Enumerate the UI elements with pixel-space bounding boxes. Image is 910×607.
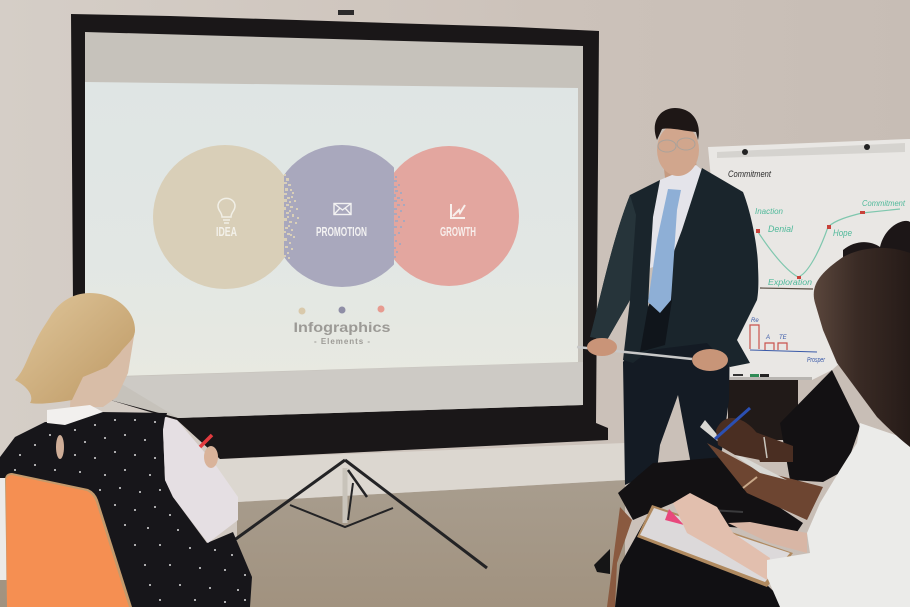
white sleeve bbox=[163, 417, 238, 543]
whiteboard notes: Inaction bbox=[755, 207, 784, 216]
dark trousers bbox=[615, 520, 790, 607]
icon: envelope bbox=[334, 204, 351, 214]
seated woman in black bbox=[607, 370, 860, 607]
slide subtitle: - Elements - bbox=[314, 337, 370, 346]
icon: growth chart bbox=[451, 204, 465, 218]
forearm bbox=[707, 443, 823, 520]
second hand bbox=[728, 522, 807, 553]
left sleeve highlight bbox=[590, 195, 636, 340]
pointer stick bbox=[577, 347, 692, 359]
clipboard paper bbox=[640, 508, 790, 582]
whiteboard notes: A bbox=[765, 335, 770, 341]
blue pen bbox=[715, 408, 750, 439]
clipboard bbox=[637, 505, 793, 587]
blonde hair bbox=[15, 293, 135, 404]
marker rail bbox=[717, 143, 905, 158]
silver bracelets bbox=[764, 437, 767, 458]
keyhole opening bbox=[56, 435, 64, 459]
hand with red pen bbox=[200, 435, 218, 468]
right hand bbox=[692, 349, 728, 371]
glasses bbox=[658, 138, 695, 152]
projected slide bbox=[85, 82, 578, 377]
lower screen band bbox=[110, 362, 583, 418]
screen surface bbox=[85, 32, 583, 418]
white dress dots bbox=[14, 419, 246, 603]
icon: light bulb bbox=[218, 198, 235, 223]
white collar bbox=[47, 405, 103, 425]
neck and face bbox=[70, 330, 135, 407]
black skirt bbox=[618, 457, 803, 532]
whiteboard notes: Re bbox=[751, 318, 759, 324]
hair bbox=[655, 108, 699, 140]
long dark hair bbox=[814, 248, 910, 447]
whiteboard notes: Prosper bbox=[807, 357, 825, 364]
whiteboard notes: Exploration bbox=[768, 278, 813, 287]
projector tripod bbox=[233, 460, 487, 568]
whiteboard notes: TE bbox=[779, 335, 788, 341]
shoe bbox=[594, 549, 610, 574]
label: growth: GROWTH bbox=[440, 224, 476, 239]
whiteboard notes: Hope bbox=[833, 228, 852, 238]
legend dots bbox=[298, 306, 384, 314]
black top bbox=[780, 370, 860, 482]
woman in white foreground bbox=[615, 248, 910, 607]
jacket bbox=[590, 168, 758, 367]
orange chair bbox=[5, 473, 132, 607]
bare leg bbox=[607, 507, 632, 607]
back audience hair bbox=[843, 221, 910, 280]
label: idea: IDEA bbox=[216, 224, 237, 239]
head bbox=[657, 124, 699, 176]
shirt bbox=[650, 165, 702, 268]
waistcoat opening bbox=[640, 262, 672, 352]
dotted dress bbox=[0, 412, 252, 607]
whiteboard notes: Denial bbox=[768, 224, 794, 234]
presenter bbox=[577, 108, 758, 574]
pink sticky note bbox=[665, 509, 684, 525]
screen frame bbox=[71, 14, 608, 459]
neck bbox=[663, 152, 697, 186]
whiteboard curve chart bbox=[750, 209, 900, 352]
trousers bbox=[623, 335, 730, 485]
stipple between promotion and growth bbox=[391, 172, 405, 258]
grey pen bbox=[710, 510, 743, 512]
stipple between idea and promotion bbox=[284, 174, 299, 259]
wrist behind hand bbox=[750, 430, 793, 462]
cabinet under whiteboard bbox=[728, 380, 798, 440]
marker tray bbox=[730, 374, 812, 380]
whiteboard notes bbox=[728, 169, 906, 364]
left hand bbox=[587, 338, 617, 356]
white blouse bbox=[767, 423, 910, 607]
hanger hook bbox=[338, 10, 354, 15]
whiteboard notes: Commitment bbox=[728, 169, 771, 179]
left sleeve edge bbox=[0, 478, 6, 580]
writing hand bbox=[673, 493, 770, 580]
white paper bbox=[700, 420, 787, 480]
whiteboard notes: Commitment bbox=[862, 199, 906, 208]
projection screen bbox=[71, 10, 608, 459]
gold bracelet bbox=[743, 477, 757, 488]
baseboard bbox=[200, 443, 625, 502]
whiteboard bbox=[708, 139, 910, 380]
circle: promotion bbox=[284, 145, 394, 287]
tie bbox=[648, 189, 681, 313]
writing hand bbox=[716, 418, 770, 460]
circle: growth bbox=[379, 146, 519, 286]
woman in foreground left bbox=[0, 293, 252, 607]
slide title: Infographics bbox=[294, 319, 391, 335]
floor bbox=[0, 480, 625, 607]
circle: idea bbox=[153, 145, 297, 289]
label: promotion: PROMOTION bbox=[316, 224, 367, 239]
